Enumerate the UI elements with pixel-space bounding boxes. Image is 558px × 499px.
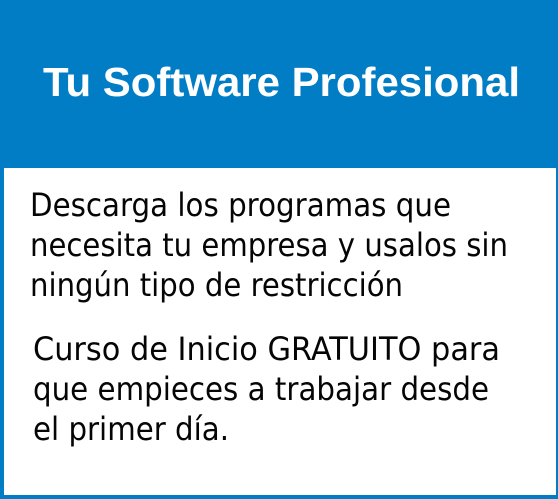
- text block: download: ningún tipo de restricción: [30, 266, 403, 304]
- text block: free course: el primer día.: [33, 410, 229, 448]
- text block: free course: que empieces a trabajar desde: [33, 370, 489, 408]
- text block: download: [30, 186, 508, 304]
- content background: [4, 168, 556, 495]
- text block: download: Descarga los programas que: [30, 186, 451, 224]
- title: Tu Software Profesional: [43, 59, 520, 105]
- text block: free course: Curso de Inicio GRATUITO para: [33, 330, 500, 368]
- text block: free course: [33, 330, 500, 448]
- panel: body content: [4, 168, 556, 495]
- text block: download: necesita tu empresa y usalos sin: [30, 226, 508, 264]
